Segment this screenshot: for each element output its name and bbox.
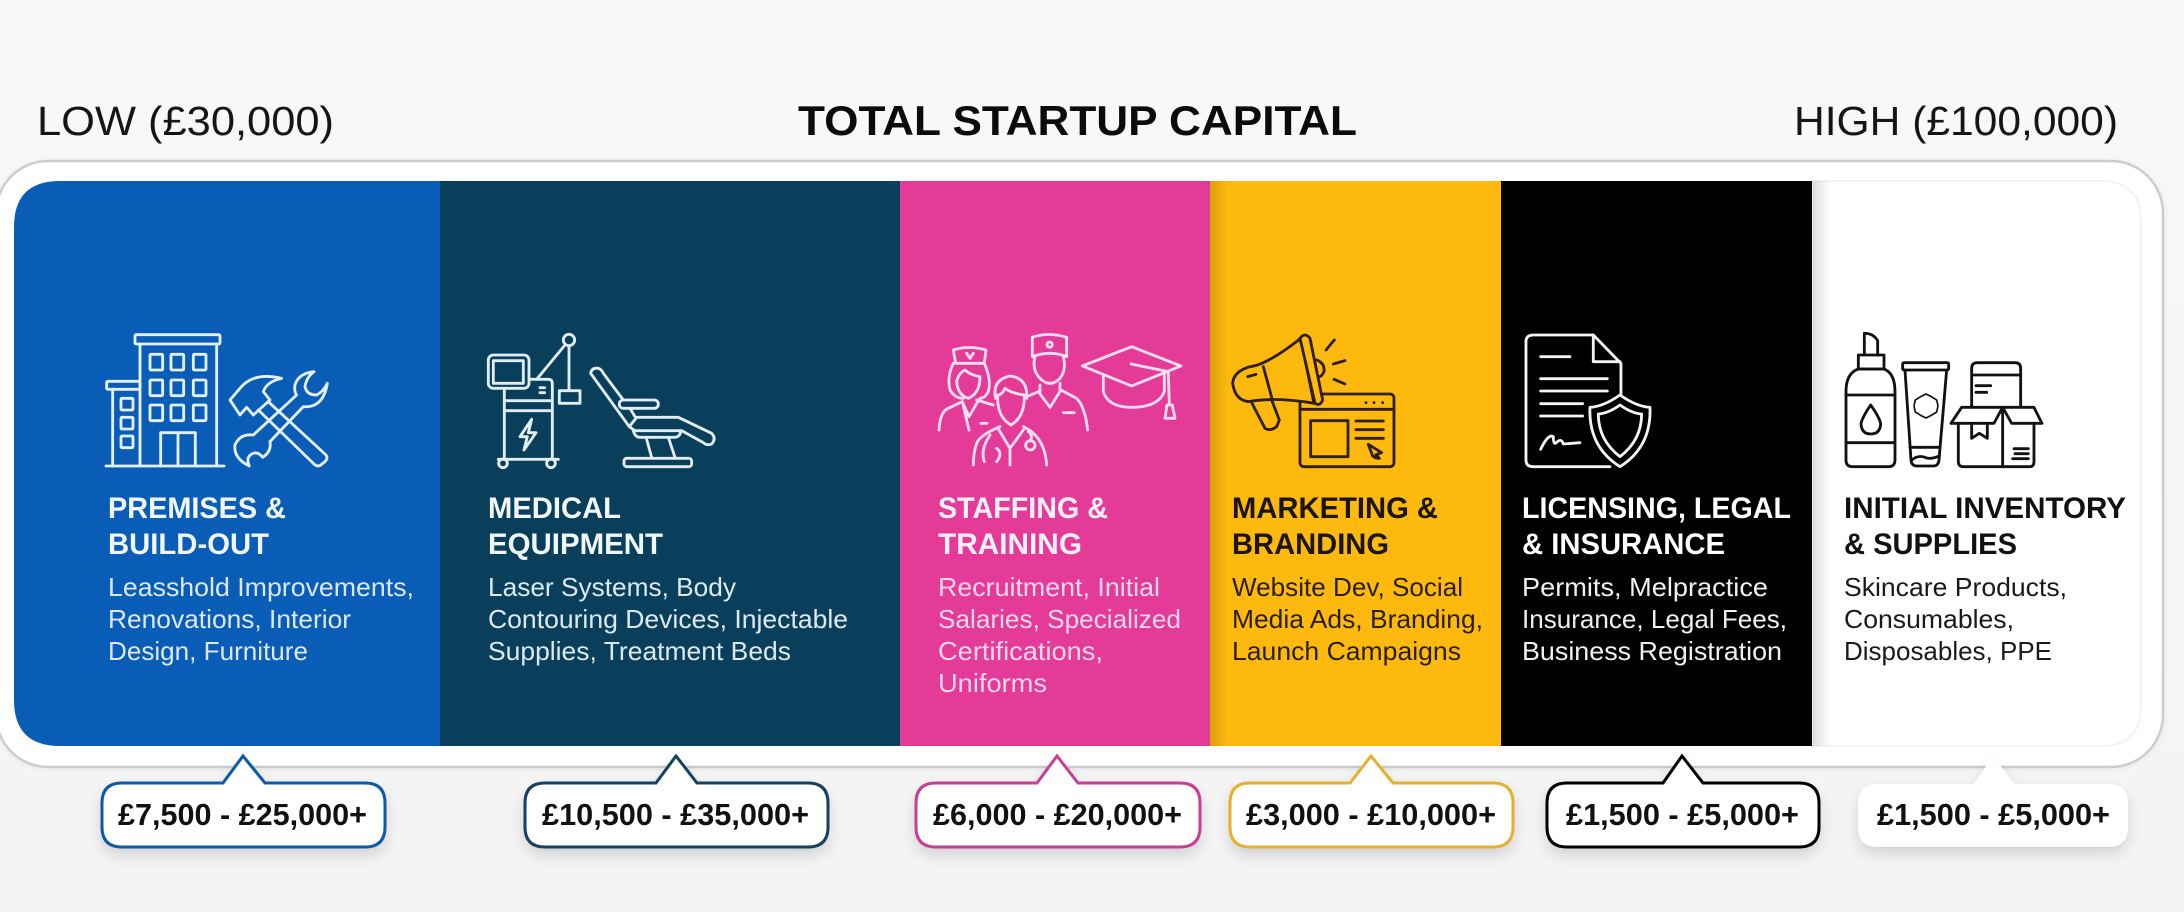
icon: skincare bottle, tube, jar and box — [1846, 333, 2042, 467]
description: Business Registration — [1522, 636, 1782, 666]
description: Disposables, PPE — [1844, 636, 2052, 666]
heading: & INSURANCE — [1522, 528, 1725, 561]
description: Uniforms — [938, 668, 1047, 698]
callout: inventory cost: £1,500 - £5,000+ — [1877, 797, 2110, 832]
heading — [1232, 492, 1438, 561]
label: high estimate: HIGH (£100,000) — [1794, 98, 2118, 144]
callout: licensing cost — [1547, 756, 1819, 847]
label: low estimate: LOW (£30,000) — [37, 98, 334, 144]
heading: & SUPPLIES — [1844, 528, 2017, 561]
heading — [1522, 492, 1791, 561]
description: Supplies, Treatment Beds — [488, 636, 791, 666]
description: Permits, Melpractice — [1522, 572, 1768, 602]
callout: equipment cost — [525, 756, 828, 847]
description: Design, Furniture — [108, 636, 308, 666]
icon: medical staff and graduation cap — [939, 334, 1181, 465]
description: Consumables, — [1844, 604, 2014, 634]
heading: TRAINING — [938, 528, 1082, 561]
icon: building with hammer and wrench — [106, 335, 327, 466]
description: Media Ads, Branding, — [1232, 604, 1483, 634]
outer container panel — [0, 161, 2163, 767]
description — [108, 572, 414, 666]
description: Skincare Products, — [1844, 572, 2067, 602]
heading — [108, 492, 286, 561]
description — [938, 572, 1181, 698]
heading — [938, 492, 1108, 561]
description: Certifications, — [938, 636, 1103, 666]
description — [1522, 572, 1787, 666]
description: Contouring Devices, Injectable — [488, 604, 848, 634]
heading: MARKETING & — [1232, 492, 1438, 525]
callout: inventory cost — [1858, 756, 2128, 847]
icon: megaphone and browser window — [1233, 335, 1394, 467]
description — [1844, 572, 2067, 666]
description: Leasshold Improvements, — [108, 572, 414, 602]
heading: PREMISES & — [108, 492, 286, 525]
callout: premises cost — [102, 756, 385, 847]
icon: contract document and shield — [1526, 335, 1650, 467]
panel: premises and build-out — [14, 181, 440, 746]
callout: licensing cost: £1,500 - £5,000+ — [1566, 797, 1799, 832]
panel: initial inventory and supplies — [1813, 181, 2141, 746]
callout: staffing cost: £6,000 - £20,000+ — [933, 797, 1182, 832]
description — [1232, 572, 1483, 666]
panel: medical equipment — [440, 181, 900, 746]
heading: BUILD-OUT — [108, 528, 269, 561]
panel: staffing and training — [900, 181, 1210, 746]
description: Salaries, Specialized — [938, 604, 1181, 634]
heading: MEDICAL — [488, 492, 621, 525]
callout: premises cost: £7,500 - £25,000+ — [118, 797, 367, 832]
heading: STAFFING & — [938, 492, 1108, 525]
callout: marketing cost — [1230, 756, 1513, 847]
description: Insurance, Legal Fees, — [1522, 604, 1787, 634]
panel: marketing and branding — [1210, 181, 1501, 746]
description: Laser Systems, Body — [488, 572, 736, 602]
callout: staffing cost — [916, 756, 1200, 847]
icon: laser machine and treatment chair — [488, 334, 714, 468]
description: Renovations, Interior — [108, 604, 351, 634]
description: Recruitment, Initial — [938, 572, 1160, 602]
callout: equipment cost: £10,500 - £35,000+ — [542, 797, 809, 832]
heading: LICENSING, LEGAL — [1522, 492, 1791, 525]
description — [488, 572, 848, 666]
heading: INITIAL INVENTORY — [1844, 492, 2126, 525]
panel: licensing, legal and insurance — [1501, 181, 1813, 746]
callout: marketing cost: £3,000 - £10,000+ — [1246, 797, 1496, 832]
heading — [1844, 492, 2126, 561]
heading: EQUIPMENT — [488, 528, 663, 561]
description: Launch Campaigns — [1232, 636, 1461, 666]
heading: BRANDING — [1232, 528, 1389, 561]
title: TOTAL STARTUP CAPITAL — [798, 97, 1357, 144]
description: Website Dev, Social — [1232, 572, 1463, 602]
heading — [488, 492, 663, 561]
